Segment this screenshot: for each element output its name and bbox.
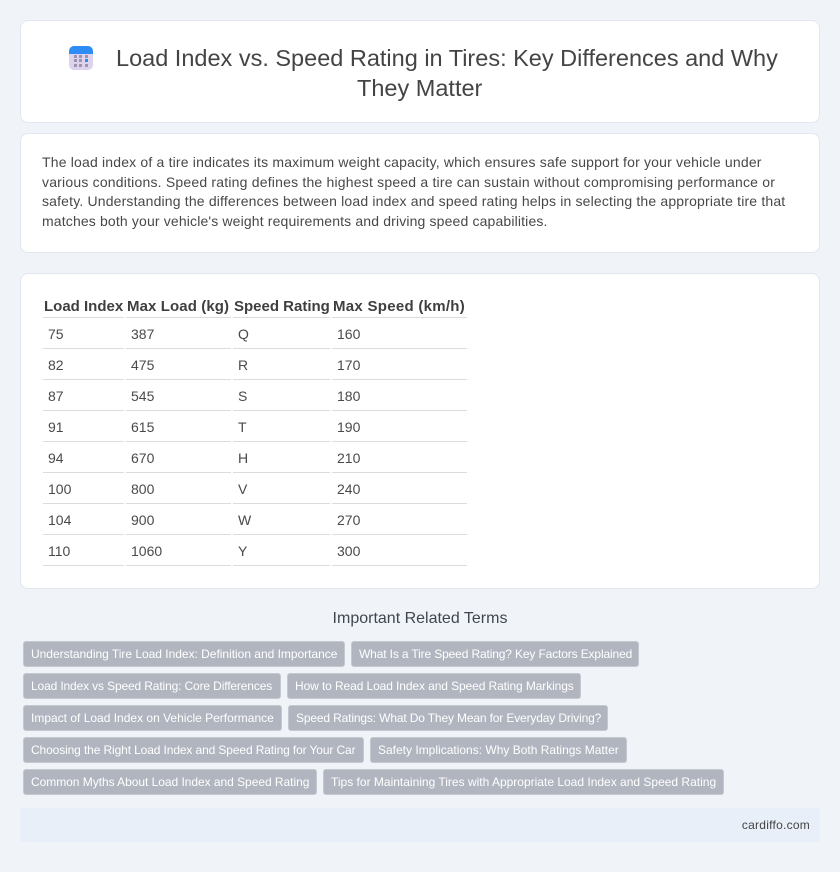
related term tags: What Is a Tire Speed Rating? Key Factors Explained — [359, 647, 632, 661]
heading: related terms: Important Related Terms — [333, 610, 507, 627]
data table: Max Load (kg) — [127, 298, 229, 315]
intro paragraph: matches both your vehicle's weight requirements and driving speed capabilities. — [42, 213, 548, 229]
footer source text: cardiffo.com — [742, 818, 810, 832]
related term tags: Tips for Maintaining Tires with Appropriate Load Index and Speed Rating — [331, 775, 716, 789]
footer bar — [20, 808, 820, 842]
data table: 900 — [131, 512, 154, 528]
data table: Y — [238, 543, 247, 559]
related term tags: Understanding Tire Load Index: Definition and Importance — [31, 647, 337, 661]
data table: Load Index — [44, 298, 123, 315]
data table: 387 — [131, 326, 154, 342]
data table: 87 — [48, 388, 64, 404]
data table: Q — [238, 326, 249, 342]
data table: 100 — [48, 481, 71, 497]
data table: 110 — [48, 543, 70, 559]
data table: S — [238, 388, 247, 404]
data table: Max Speed (km/h) — [333, 298, 465, 315]
related term tags: Common Myths About Load Index and Speed Rating — [31, 775, 309, 789]
data table: R — [238, 357, 248, 373]
related term tags — [23, 641, 724, 795]
table header — [43, 298, 467, 566]
intro paragraph: various conditions. Speed rating defines the highest speed a tire can sustain without compromising performance or — [42, 174, 775, 190]
title — [116, 45, 778, 101]
related term tags: Load Index vs Speed Rating: Core Differences — [31, 679, 272, 693]
related term tags: Impact of Load Index on Vehicle Performance — [31, 711, 274, 725]
related term tags: Choosing the Right Load Index and Speed Rating for Your Car — [31, 743, 356, 757]
data table: 270 — [337, 512, 360, 528]
intro paragraph: safety. Understanding the differences between load index and speed rating helps in selecting the appropriate tire that — [42, 193, 785, 209]
panel: title card — [20, 20, 820, 123]
data table: 670 — [131, 450, 154, 466]
data table: 94 — [48, 450, 64, 466]
related term tags: Safety Implications: Why Both Ratings Matter — [378, 743, 619, 757]
related term tags: How to Read Load Index and Speed Rating Markings — [295, 679, 574, 693]
data table: 104 — [48, 512, 71, 528]
data table: 170 — [337, 357, 360, 373]
data table: T — [238, 419, 247, 435]
data table: Speed Rating — [234, 298, 330, 315]
data table: 75 — [48, 326, 64, 342]
data table: 1060 — [131, 543, 162, 559]
data table: V — [238, 481, 247, 497]
data table: 210 — [337, 450, 360, 466]
data table: W — [238, 512, 251, 528]
intro paragraph: The load index of a tire indicates its maximum weight capacity, which ensures safe support for your vehicle under — [42, 154, 762, 170]
title: Load Index vs. Speed Rating in Tires: Key Differences and Why — [116, 45, 778, 71]
icon: calendar grid — [69, 46, 93, 70]
data table — [43, 298, 467, 566]
data table: 615 — [131, 419, 154, 435]
data table: 545 — [131, 388, 154, 404]
panel: intro text — [20, 133, 820, 253]
related term tags: Speed Ratings: What Do They Mean for Everyday Driving? — [296, 711, 601, 725]
data table: 475 — [131, 357, 154, 373]
data table: H — [238, 450, 248, 466]
data table: 300 — [337, 543, 360, 559]
title: They Matter — [357, 75, 482, 101]
data table: 91 — [48, 419, 64, 435]
data table: 800 — [131, 481, 154, 497]
data table: 240 — [337, 481, 360, 497]
panel: table card — [20, 273, 820, 589]
intro paragraph — [42, 154, 786, 229]
data table: 160 — [337, 326, 360, 342]
data table: 180 — [337, 388, 360, 404]
data table: 190 — [337, 419, 360, 435]
data table: 82 — [48, 357, 64, 373]
